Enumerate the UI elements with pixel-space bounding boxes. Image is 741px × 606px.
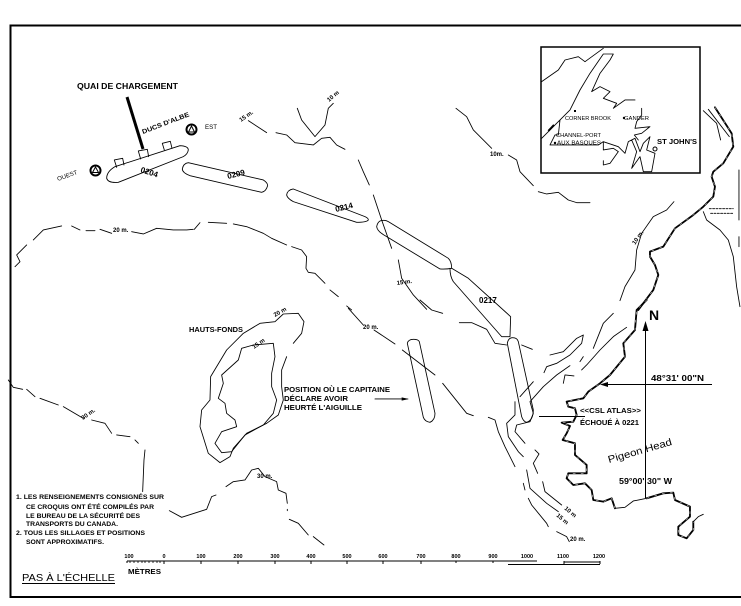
contour 15 m centre xyxy=(373,195,427,309)
callout: captain's reported position: DÉCLARE AVOIR xyxy=(284,394,349,403)
inset label: Channel-Port: CHANNEL-PORT xyxy=(556,133,602,139)
latitude label: 48°31' 00"N xyxy=(651,373,704,383)
contour 20 m south of track xyxy=(348,308,363,325)
label: east: EST xyxy=(205,125,217,131)
inset marker: Gander xyxy=(623,117,625,119)
depth labels: 20 m. xyxy=(570,537,586,543)
depth labels: 10 m. xyxy=(632,230,646,246)
north letter: N xyxy=(649,307,659,323)
depth labels: 30 m. xyxy=(81,408,97,422)
place name: Pigeon Head: Pigeon Head xyxy=(607,437,673,466)
depth labels: 15 m xyxy=(252,338,266,351)
contour 10 m centre xyxy=(456,108,590,203)
depth labels: 10 m xyxy=(563,506,577,519)
track 0214 xyxy=(287,189,368,222)
inset label: Corner Brook: CORNER BROOK xyxy=(565,116,611,122)
callout: captain's reported position xyxy=(284,385,390,412)
heading: loading wharf: QUAI DE CHARGEMENT xyxy=(77,82,178,91)
depth labels xyxy=(81,90,646,543)
depth labels: 15 m. xyxy=(396,279,413,287)
notes: SONT APPROXIMATIFS. xyxy=(26,539,104,546)
inset label: St. John's: ST JOHN'S xyxy=(657,137,697,146)
scale bar: 1100 xyxy=(557,554,569,560)
latitude line with arrow xyxy=(600,373,712,387)
label: dolphins: DUCS D'ALBE xyxy=(141,111,191,136)
longitude label: 59°00' 30" W xyxy=(619,477,672,486)
track 0209 xyxy=(182,163,268,192)
contour 20 m north xyxy=(15,222,352,310)
scale bar: 500 xyxy=(342,554,352,560)
callout: captain's reported position: HEURTÉ L'AIGUILLE xyxy=(284,403,362,412)
label: time 0204: 0204 xyxy=(139,165,160,180)
grounding callout: <<CSL ATLAS>> xyxy=(580,406,642,415)
depth labels: 15 m. xyxy=(239,110,255,124)
callout: Hauts-fonds: HAUTS-FONDS xyxy=(189,327,243,334)
notes xyxy=(16,492,164,546)
track 0217 xyxy=(450,268,511,337)
scale bar: 100 xyxy=(124,554,134,560)
depth labels: 20 m. xyxy=(363,325,379,331)
scale bar: 100 xyxy=(196,554,206,560)
shoal contour inner xyxy=(215,343,277,453)
scale bar: 900 xyxy=(488,554,498,560)
depth labels: 15 m xyxy=(555,513,569,526)
notes: TRANSPORTS DU CANADA. xyxy=(26,521,118,528)
inset coastline xyxy=(542,48,655,172)
north arrow and meridian xyxy=(642,307,659,498)
depth labels: 10 m xyxy=(326,90,341,104)
scale bar: 400 xyxy=(306,554,316,560)
notes: CE CROQUIS ONT ÉTÉ COMPILÉS PAR xyxy=(26,502,154,511)
depth labels: 20 m xyxy=(273,307,288,319)
scale bar: 1000 xyxy=(521,554,533,560)
scale bar: 700 xyxy=(416,554,426,560)
track between 0214 and 0217 xyxy=(377,220,452,269)
ship at berth with bollards xyxy=(107,141,188,182)
coastline xyxy=(562,107,740,538)
contour 30 m west xyxy=(8,380,145,492)
inset marker: Corner Brook xyxy=(574,110,576,112)
label: 0214: 0214 xyxy=(334,201,354,214)
notes: 2. TOUS LES SILLAGES ET POSITIONS xyxy=(16,530,146,537)
callout: captain's reported position: POSITION OÙ LE CAPITAINE xyxy=(284,385,390,394)
label: 0217: 0217 xyxy=(479,296,497,305)
inset label: Gander: GANDER xyxy=(624,116,649,122)
contour 15 m north xyxy=(248,121,369,185)
shoal contour outer xyxy=(200,313,304,463)
scale bar: 800 xyxy=(451,554,461,560)
dolphin: east xyxy=(186,124,196,134)
inset label: aux Basques: AUX BASQUES xyxy=(557,140,601,146)
inshore contours xyxy=(374,300,532,467)
scale bar: 600 xyxy=(378,554,388,560)
contour 10 m north xyxy=(297,103,333,137)
depth labels: 10m. xyxy=(490,152,504,158)
depth labels: 20 m. xyxy=(113,228,129,234)
not to scale note: PAS À L'ÉCHELLE xyxy=(22,571,115,584)
inset map of Newfoundland xyxy=(541,47,700,173)
loading wharf and ship xyxy=(57,82,217,183)
scale bar xyxy=(124,554,605,576)
scale bar: 300 xyxy=(270,554,280,560)
contour 10 m east xyxy=(620,202,674,301)
inset marker: St. John's xyxy=(653,147,657,151)
track segments xyxy=(182,163,533,422)
scale bar: 0 xyxy=(162,554,166,560)
grounding callout: ÉCHOUÉ À 0221 xyxy=(580,418,639,427)
grounding callout xyxy=(539,406,642,427)
depth contours xyxy=(8,90,674,545)
inset marker: Port aux Basques xyxy=(554,142,556,144)
scale bar: 1200 xyxy=(593,554,605,560)
label: west: OUEST xyxy=(57,170,79,183)
inset frame xyxy=(541,47,700,173)
scale bar: 200 xyxy=(233,554,243,560)
reported striking position track xyxy=(407,339,435,422)
notes: LE BUREAU DE LA SÉCURITÉ DES xyxy=(26,511,141,520)
contour 30 m south xyxy=(169,468,324,545)
scale unit: MÈTRES xyxy=(128,567,161,576)
final track to grounding xyxy=(507,338,533,422)
label: 0209: 0209 xyxy=(226,168,246,181)
wharf jetty xyxy=(127,97,143,149)
notes: 1. LES RENSEIGNEMENTS CONSIGNÉS SUR xyxy=(16,492,164,501)
dolphin: west xyxy=(90,166,100,176)
depth labels: 30 m. xyxy=(257,474,273,480)
arrow to captain's position xyxy=(375,398,407,400)
